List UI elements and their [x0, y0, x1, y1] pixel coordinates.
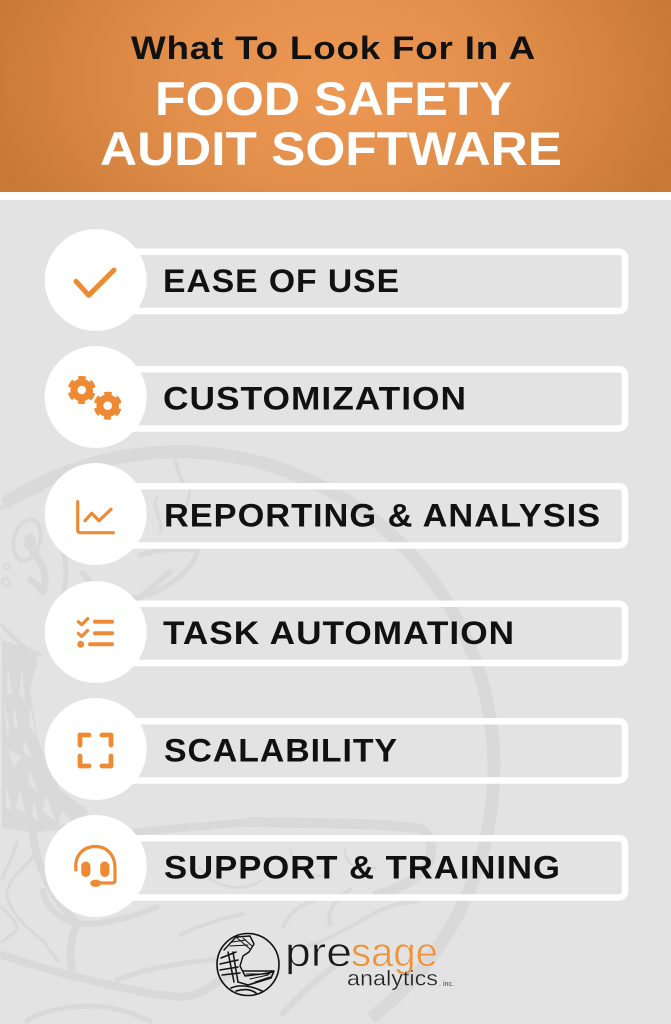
item: Support & Training [45, 815, 625, 917]
label: TASK AUTOMATION: TASK AUTOMATION [163, 615, 515, 651]
icon: gears [70, 378, 119, 418]
wordmark: sage: sage [351, 929, 438, 975]
label: REPORTING & ANALYSIS: REPORTING & ANALYSIS [164, 498, 601, 534]
title: FOOD SAFETY: FOOD SAFETY [155, 72, 512, 125]
background watermark: enlarged logo figure [2, 452, 494, 1021]
logo emblem [217, 934, 279, 996]
label: SUPPORT & TRAINING: SUPPORT & TRAINING [164, 850, 561, 886]
logo: Presage Analytics [217, 929, 454, 996]
item: Ease of Use [45, 229, 625, 331]
icon: expand corners [80, 735, 111, 766]
label: EASE OF USE: EASE OF USE [163, 263, 400, 299]
icon: line chart [78, 502, 113, 533]
wordmark: pre: pre [285, 929, 352, 975]
item: Task Automation [45, 581, 625, 683]
icon: check mark [76, 270, 114, 295]
wordmark: analytics: analytics [347, 968, 438, 991]
item: Scalability [45, 698, 625, 800]
wordmark: inc: . inc. [439, 981, 454, 988]
header banner [0, 0, 671, 200]
icon: checklist [77, 619, 112, 648]
title: AUDIT SOFTWARE: AUDIT SOFTWARE [100, 122, 562, 175]
item: Reporting & Analysis [45, 463, 625, 565]
label: SCALABILITY: SCALABILITY [164, 733, 398, 769]
label: CUSTOMIZATION: CUSTOMIZATION [163, 380, 467, 416]
title: What To Look For In A: What To Look For In A [131, 30, 536, 66]
icon: headset [76, 846, 115, 887]
item: Customization [45, 346, 625, 448]
